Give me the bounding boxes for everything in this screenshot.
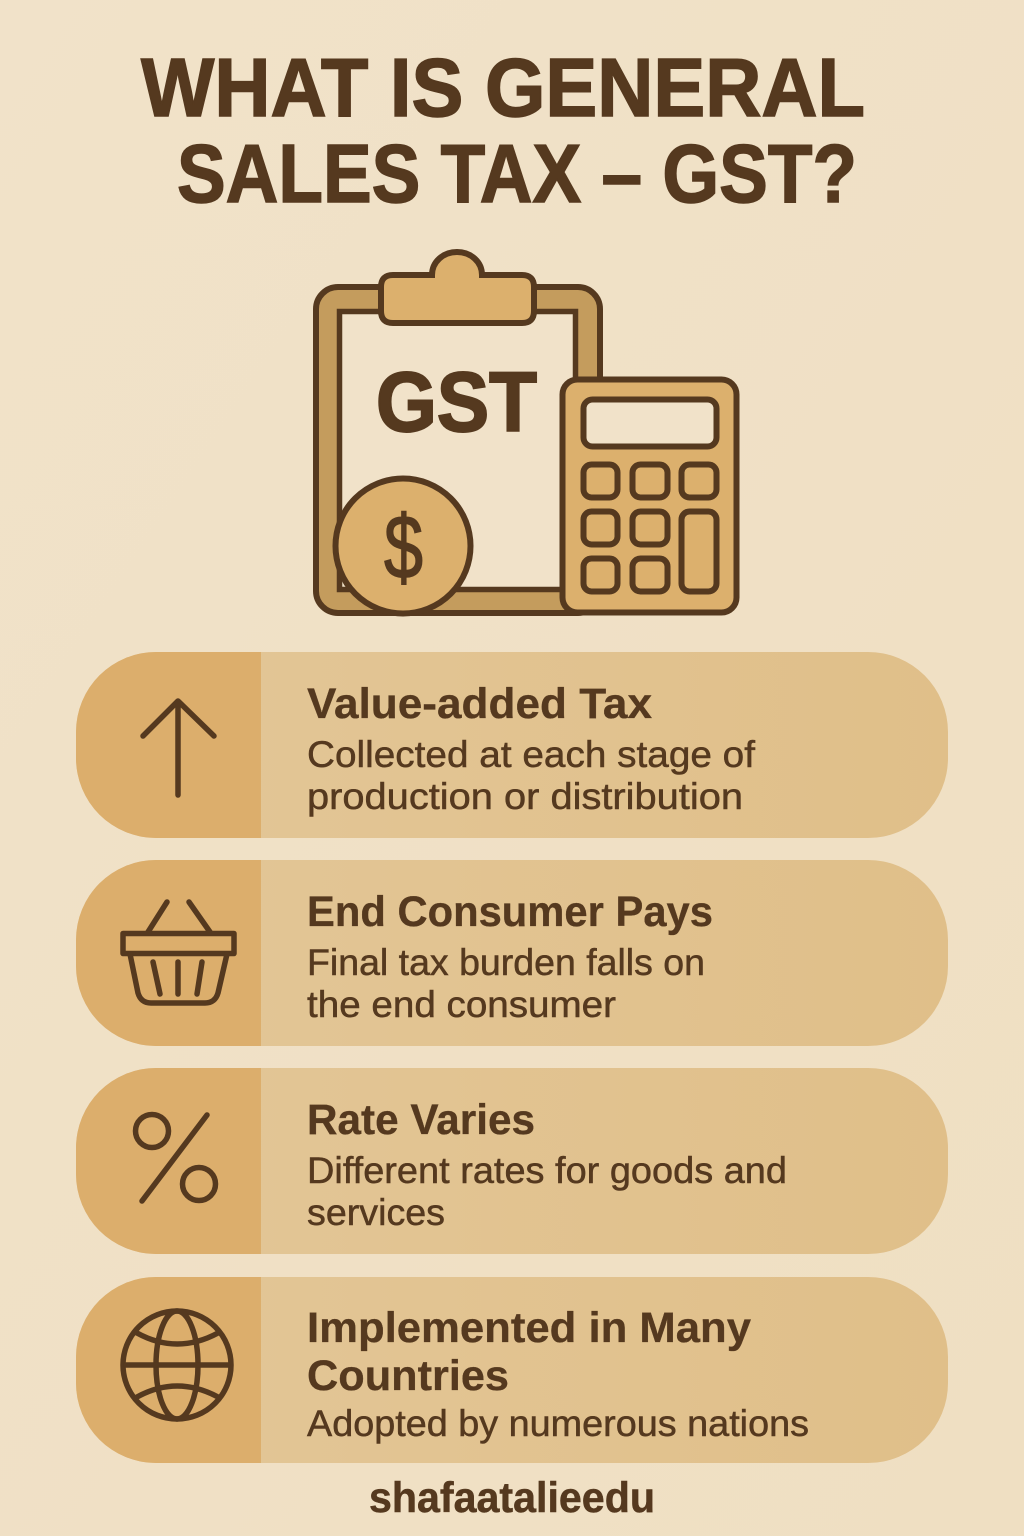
panel text: rate varies: Different rates for goods and — [307, 1150, 787, 1191]
panel heading: rate varies: Rate Varies — [307, 1096, 535, 1144]
panel text: value-added tax — [307, 734, 756, 817]
panel text: implemented in many countries: Adopted by numerous nations — [307, 1403, 809, 1444]
panel: end consumer pays — [76, 860, 948, 1046]
icon: up arrow — [143, 701, 214, 795]
coin — [336, 478, 470, 614]
title: SALES TAX – GST? — [177, 127, 857, 220]
panel: value-added tax — [76, 652, 948, 838]
panel text: value-added tax: Collected at each stage of — [307, 734, 756, 775]
clipboard clip — [381, 252, 534, 323]
icon: percent sign — [136, 1114, 216, 1201]
GST label: GST — [376, 355, 537, 449]
panel text: rate varies — [307, 1150, 787, 1233]
panel heading: value-added tax: Value-added Tax — [307, 680, 652, 728]
icon: shopping basket — [123, 902, 234, 1003]
title: WHAT IS GENERAL — [141, 41, 865, 134]
footer credit: shafaatalieedu — [369, 1474, 655, 1522]
panel heading: implemented in many countries: Implemented in Many — [307, 1304, 751, 1352]
coin: $ — [384, 498, 423, 598]
panel heading: end consumer pays: End Consumer Pays — [307, 888, 713, 936]
panel heading: implemented in many countries — [307, 1304, 751, 1400]
calculator — [562, 380, 736, 612]
panel text: value-added tax: production or distribution — [307, 776, 743, 817]
panel: rate varies — [76, 1068, 948, 1254]
panel text: rate varies: services — [307, 1192, 445, 1233]
clipboard board — [316, 287, 600, 613]
icon: globe — [123, 1311, 231, 1419]
illustration: GST clipboard, coin and calculator — [316, 252, 736, 614]
panel text: end consumer pays: the end consumer — [307, 984, 616, 1025]
panel: implemented in many countries — [76, 1277, 948, 1463]
panel heading: implemented in many countries: Countries — [307, 1352, 509, 1400]
clipboard paper — [340, 312, 576, 590]
panel text: end consumer pays — [307, 942, 705, 1025]
panel text: end consumer pays: Final tax burden falls on — [307, 942, 705, 983]
title — [141, 41, 865, 220]
